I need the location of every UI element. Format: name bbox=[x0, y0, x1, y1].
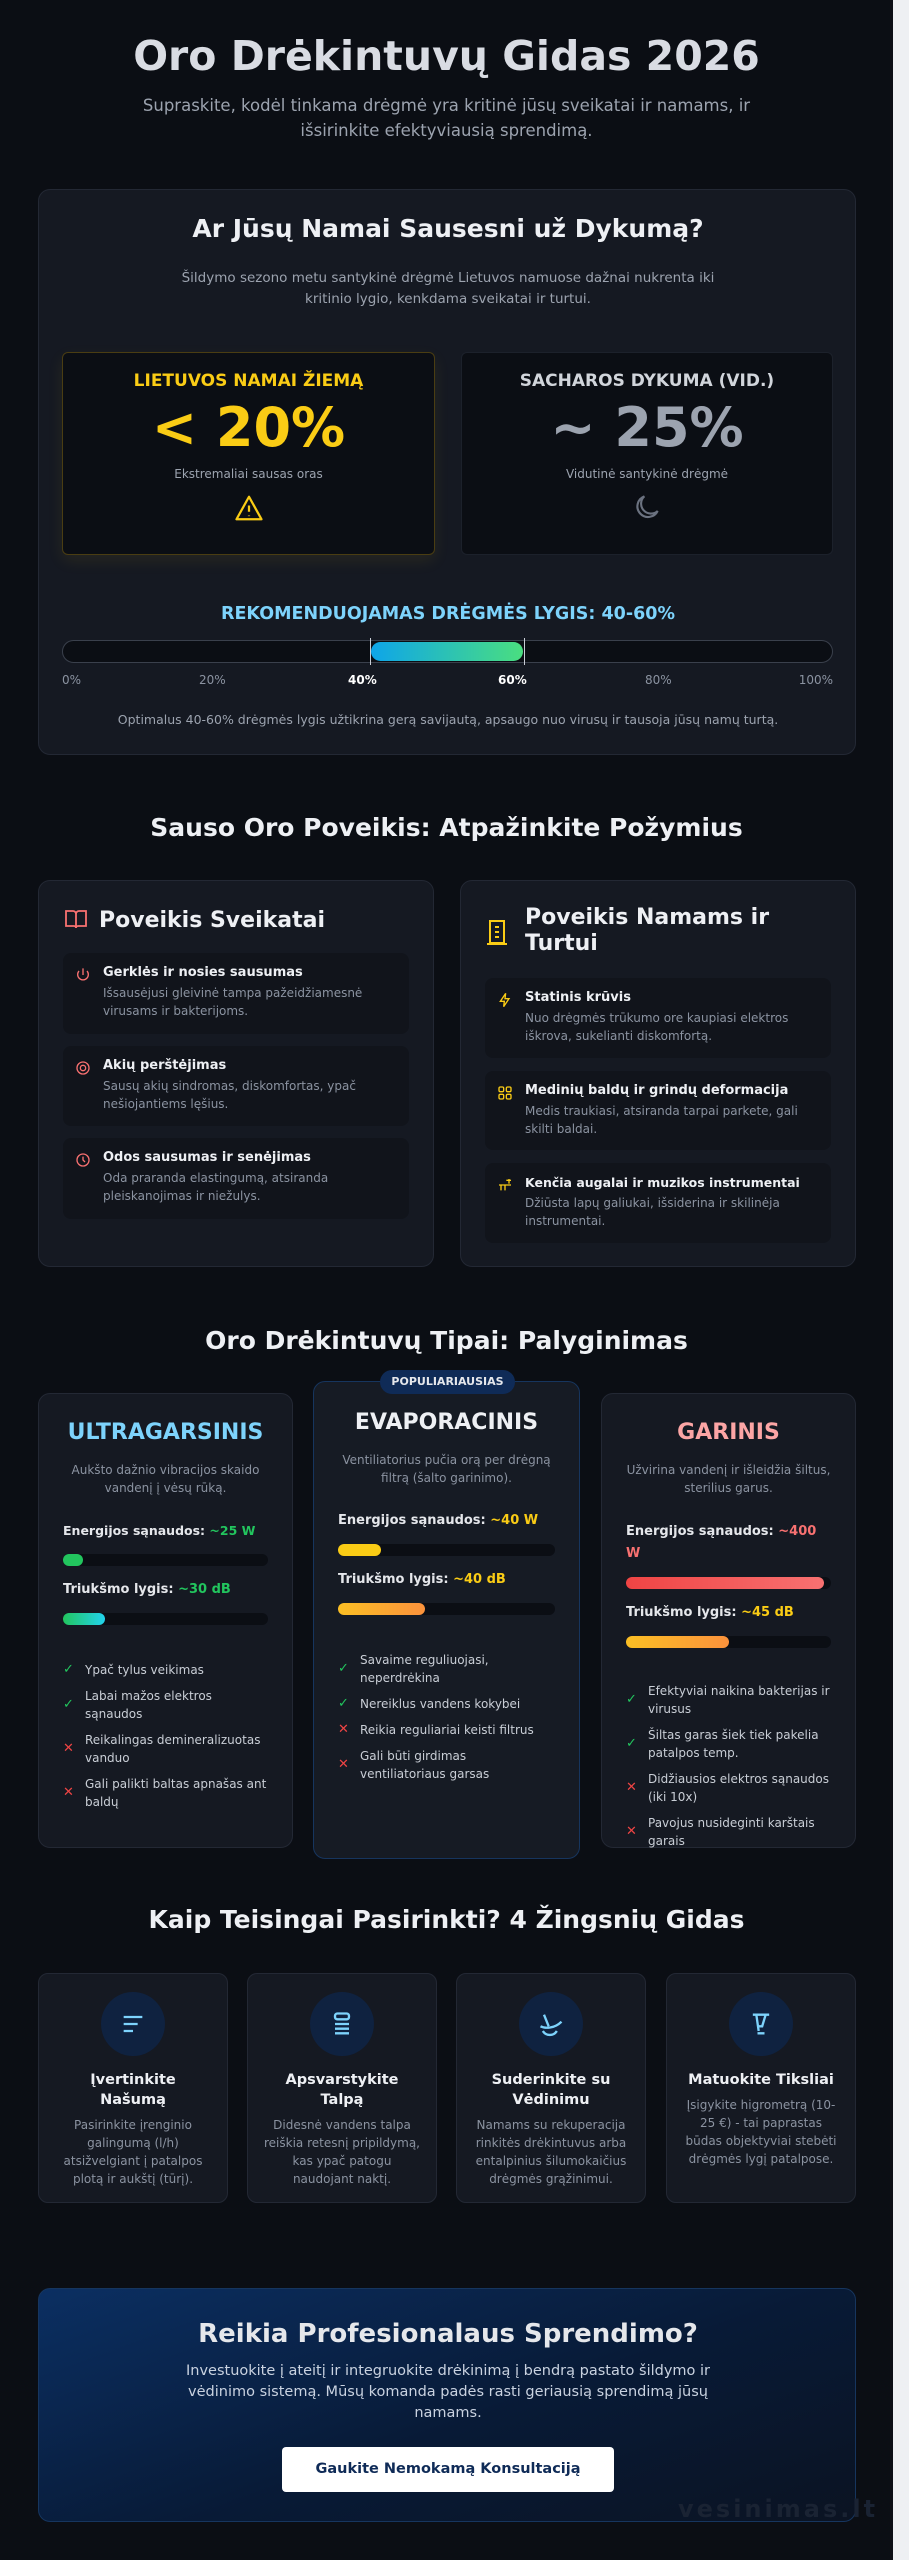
CTA text: Investuokite į ateitį ir integruokite drėkinimą į bendrą pastato šildymo ir vėdinimo sistemą. Mūsų komanda padės rasti geriausią sprendimą jūsų namams. bbox=[186, 2363, 710, 2421]
step 3: Suderinkite su Vėdinimu bbox=[492, 2072, 610, 2108]
pros and cons: ✓ bbox=[626, 1736, 637, 1751]
step 4 bbox=[666, 1973, 856, 2203]
scale labels: 0% bbox=[62, 673, 81, 687]
title: ULTRAGARSINIS bbox=[68, 1420, 263, 1445]
item: plants: Džiūsta lapų galiukai, išsiderina ir skilinėja instrumentai. bbox=[525, 1196, 780, 1228]
icon: ventilation bbox=[519, 1992, 583, 2056]
pros and cons: ✓ bbox=[338, 1696, 349, 1711]
pros and cons: ✕ bbox=[626, 1780, 637, 1795]
item: eyes: Sausų akių sindromas, diskomfortas, ypač nešiojantiems lęšius. bbox=[103, 1079, 356, 1111]
step 2: Didesnė vandens talpa reiškia retesnį pripildymą, kas ypač patogu naudojant naktį. bbox=[264, 2118, 420, 2186]
heading: health: Poveikis Sveikatai bbox=[99, 908, 325, 933]
card: steam bbox=[601, 1393, 856, 1848]
humidity scale bar bbox=[62, 640, 833, 663]
step 1: Pasirinkite įrenginio galingumą (l/h) atsižvelgiant į patalpos plotą ir aukštį (tūrį). bbox=[64, 2118, 202, 2186]
subtitle: Supraskite, kodėl tinkama drėgmė yra kritinė jūsų sveikatai ir namams, ir išsirinkite efektyviausią sprendimą. bbox=[143, 96, 750, 140]
pros and cons: ✕ bbox=[63, 1741, 74, 1756]
card: ultrasonic: Aukšto dažnio vibracijos skaido vandenį į vėsų rūką. bbox=[72, 1463, 259, 1495]
noise bar: Triukšmo lygis: ~30 dB bbox=[63, 1582, 231, 1597]
item: throat: Gerklės ir nosies sausumas bbox=[103, 965, 303, 980]
heading: home: Poveikis Namams ir Turtui bbox=[525, 905, 769, 956]
stat card: Sahara: Vidutinė santykinė drėgmė bbox=[566, 467, 728, 481]
item: skin: Odos sausumas ir senėjimas bbox=[103, 1150, 311, 1165]
pros and cons: Efektyviai naikina bakterijas ir virusus bbox=[648, 1684, 830, 1716]
item: skin: Oda praranda elastingumą, atsiranda pleiskanojimas ir niežulys. bbox=[103, 1171, 328, 1203]
pros and cons bbox=[338, 1653, 534, 1781]
card: ultrasonic bbox=[38, 1393, 293, 1848]
footnote: Optimalus 40-60% drėgmės lygis užtikrina gerą savijautą, apsaugo nuo virusų ir tausoja jūsų namų turtą. bbox=[118, 712, 778, 727]
pros and cons: Didžiausios elektros sąnaudos (iki 10x) bbox=[648, 1772, 829, 1804]
panel: health effects bbox=[38, 880, 434, 1267]
pros and cons: Ypač tylus veikimas bbox=[85, 1663, 204, 1677]
step 4: Įsigykite higrometrą (10-25 €) - tai paprastas būdas objektyviai stebėti drėgmės lygį patalpose. bbox=[685, 2098, 836, 2166]
item: eyes bbox=[63, 1046, 409, 1126]
item: wood: Medinių baldų ir grindų deformacija bbox=[525, 1083, 788, 1098]
pros and cons: Šiltas garas šiek tiek pakelia patalpos temp. bbox=[648, 1728, 819, 1760]
CTA button: Gaukite Nemokamą Konsultaciją bbox=[315, 2461, 581, 2477]
item: static bbox=[485, 978, 831, 1058]
step 1 bbox=[38, 1973, 228, 2203]
title: GARINIS bbox=[677, 1420, 780, 1445]
section heading: steps: Kaip Teisingai Pasirinkti? 4 Žingsnių Gidas bbox=[149, 1905, 744, 1934]
stat card: Sahara: ~ 25% bbox=[550, 396, 744, 459]
stat card: Sahara bbox=[461, 352, 833, 555]
icon: hygrometer bbox=[729, 1992, 793, 2056]
pros and cons: Pavojus nusideginti karštais garais bbox=[648, 1816, 815, 1848]
scale labels: 20% bbox=[199, 673, 226, 687]
icon: warning bbox=[235, 496, 263, 520]
pros and cons: ✕ bbox=[338, 1722, 349, 1737]
pros and cons: Gali būti girdimas ventiliatoriaus garsas bbox=[360, 1749, 489, 1781]
item: plants bbox=[485, 1163, 831, 1243]
scale labels: 60% bbox=[498, 673, 527, 687]
stat card: Sahara: SACHAROS DYKUMA (VID.) bbox=[520, 371, 774, 391]
recommended heading: REKOMENDUOJAMAS DRĖGMĖS LYGIS: 40-60% bbox=[221, 604, 675, 624]
step 3: Namams su rekuperacija rinkitės drėkintuvus arba entalpinius šilumokaičius drėgmės grąžinimui. bbox=[476, 2118, 626, 2186]
scale labels: 100% bbox=[799, 673, 833, 687]
icon: tank bbox=[310, 1992, 374, 2056]
pros and cons bbox=[626, 1684, 830, 1848]
CTA title: Reikia Profesionalaus Sprendimo? bbox=[198, 2319, 698, 2349]
item: wood bbox=[485, 1071, 831, 1150]
item: static: Statinis krūvis bbox=[525, 990, 631, 1005]
pros and cons: ✓ bbox=[338, 1661, 349, 1676]
energy bar: Energijos sąnaudos: ~25 W bbox=[63, 1523, 255, 1538]
pros and cons: Reikia reguliariai keisti filtrus bbox=[360, 1723, 534, 1737]
item: plants: Kenčia augalai ir muzikos instrumentai bbox=[525, 1175, 800, 1190]
item: eyes: Akių perštėjimas bbox=[103, 1058, 226, 1073]
item: wood: Medis traukiasi, atsiranda tarpai parkete, gali skilti baldai. bbox=[525, 1104, 798, 1136]
badge: POPULIARIAUSIAS bbox=[391, 1375, 504, 1388]
pros and cons: ✓ bbox=[63, 1697, 74, 1712]
pros and cons: ✕ bbox=[626, 1824, 637, 1839]
noise bar: Triukšmo lygis: ~45 dB bbox=[626, 1605, 794, 1620]
icon: lines bbox=[101, 1992, 165, 2056]
pros and cons: Savaime reguliuojasi, neperdrėkina bbox=[360, 1653, 489, 1685]
stat card: Lithuania: LIETUVOS NAMAI ŽIEMĄ bbox=[134, 371, 363, 391]
item: throat bbox=[63, 953, 409, 1034]
pros and cons: ✕ bbox=[338, 1757, 349, 1772]
item: static: Nuo drėgmės trūkumo ore kaupiasi elektros iškrova, sukelianti diskomfortą. bbox=[525, 1011, 788, 1043]
CTA panel bbox=[38, 2288, 856, 2522]
intro text: Šildymo sezono metu santykinė drėgmė Lietuvos namuose dažnai nukrenta iki kritinio lygio, kenkdama sveikatai ir turtui. bbox=[182, 270, 714, 307]
energy bar: Energijos sąnaudos: ~40 W bbox=[338, 1513, 538, 1528]
pros and cons: Reikalingas demineralizuotas vanduo bbox=[85, 1733, 260, 1765]
CTA button bbox=[282, 2447, 614, 2492]
pros and cons: Gali palikti baltas apnašas ant baldų bbox=[85, 1777, 266, 1809]
stat card: Lithuania: < 20% bbox=[152, 396, 345, 459]
scale labels bbox=[62, 673, 833, 687]
step 1: Įvertinkite Našumą bbox=[90, 2072, 176, 2108]
title: Oro Drėkintuvų Gidas 2026 bbox=[133, 32, 760, 80]
step 3 bbox=[456, 1973, 646, 2203]
step 4: Matuokite Tiksliai bbox=[688, 2072, 834, 2088]
pros and cons: ✕ bbox=[63, 1785, 74, 1800]
step 2 bbox=[247, 1973, 437, 2203]
icon: moon bbox=[636, 495, 658, 518]
watermark: vesinimas.lt bbox=[678, 2495, 878, 2523]
badge bbox=[380, 1370, 515, 1394]
scale labels: 40% bbox=[348, 673, 377, 687]
pros and cons bbox=[63, 1662, 266, 1809]
item: throat: Išsausėjusi gleivinė tampa pažeidžiamesnė virusams ir bakterijoms. bbox=[103, 986, 362, 1018]
stat card: Lithuania: Ekstremaliai sausas oras bbox=[174, 467, 323, 481]
stat card: Lithuania bbox=[62, 352, 435, 555]
section heading: types: Oro Drėkintuvų Tipai: Palyginimas bbox=[205, 1326, 688, 1355]
scale labels: 80% bbox=[645, 673, 672, 687]
icon: building bbox=[487, 920, 507, 945]
section heading: dry air effects: Sauso Oro Poveikis: Atpažinkite Požymius bbox=[150, 813, 743, 842]
energy bar: Energijos sąnaudos: ~400 W bbox=[626, 1524, 816, 1561]
step 2: Apsvarstykite Talpą bbox=[285, 2072, 398, 2108]
panel: desert comparison bbox=[38, 189, 856, 755]
item: skin bbox=[63, 1138, 409, 1219]
title: EVAPORACINIS bbox=[355, 1410, 538, 1435]
card: steam: Užvirina vandenį ir išleidžia šiltus, sterilius garus. bbox=[627, 1463, 830, 1495]
pros and cons: ✓ bbox=[626, 1692, 637, 1707]
card: evaporative: Ventiliatorius pučia orą per drėgną filtrą (šalto garinimo). bbox=[342, 1453, 551, 1485]
pros and cons: Nereiklus vandens kokybei bbox=[360, 1697, 520, 1711]
noise bar: Triukšmo lygis: ~40 dB bbox=[338, 1572, 506, 1587]
panel: home effects bbox=[460, 880, 856, 1267]
card: evaporative bbox=[313, 1381, 580, 1859]
pros and cons: ✓ bbox=[63, 1662, 74, 1677]
panel heading: Ar Jūsų Namai Sausesni už Dykumą? bbox=[192, 214, 704, 243]
pros and cons: Labai mažos elektros sąnaudos bbox=[85, 1689, 212, 1721]
